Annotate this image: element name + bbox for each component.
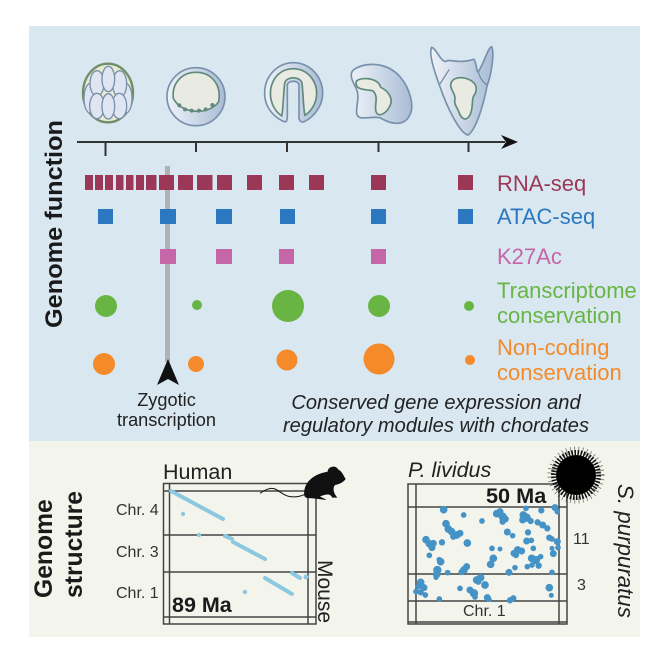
chromosome labels: Chr. 3: [116, 544, 159, 561]
embryo: gastrula: [265, 63, 323, 122]
embryo: pluteus: [431, 47, 493, 135]
RNA-seq squares: [85, 175, 473, 190]
K27Ac squares: [160, 249, 386, 264]
label: P. lividus: P. lividus: [408, 458, 492, 482]
dot plot: human vs mouse: [116, 460, 336, 624]
dot plot: P. lividus vs S. purpuratus: [408, 458, 638, 624]
legend labels: K27Ac: [497, 244, 562, 269]
label: zygotic transcription: Zygotic: [137, 390, 196, 410]
legend labels: [497, 171, 637, 385]
chromosome labels: Chr. 1: [116, 585, 159, 602]
embryo: blastula: [167, 68, 225, 126]
heading: genome structure: structure: [61, 491, 88, 598]
label: zygotic transcription: transcription: [117, 410, 216, 430]
legend labels: conservation: [497, 303, 622, 328]
embryo: prism: [351, 64, 412, 123]
label: mouse: Mouse: [313, 560, 336, 623]
legend labels: conservation: [497, 360, 622, 385]
label: 89 Ma: 89 Ma: [172, 593, 233, 617]
chromosome labels: [116, 502, 159, 602]
caption: conserved modules: regulatory modules with chordates: [283, 415, 589, 437]
legend labels: RNA-seq: [497, 171, 586, 196]
panel: genome structure: [29, 441, 640, 637]
label: 50 Ma: 50 Ma: [486, 483, 547, 508]
panel: genome function: [29, 26, 640, 441]
transcriptome conservation circles: [95, 290, 474, 322]
labels: chromosomes: [463, 531, 590, 620]
legend labels: Non-coding: [497, 335, 610, 360]
legend labels: ATAC-seq: [497, 204, 595, 229]
chromosome labels: Chr. 4: [116, 502, 159, 519]
zygotic transcription arrowhead: [157, 359, 179, 385]
label: human: Human: [163, 460, 232, 484]
non-coding conservation circles: [93, 344, 475, 375]
labels: chromosomes: 11: [573, 531, 590, 548]
label: S. purpuratus: S. purpuratus: [613, 484, 638, 618]
timeline arrow: [77, 135, 518, 156]
zygotic transcription marker line: [165, 166, 170, 362]
heading: genome structure: [31, 491, 88, 598]
icon: sea urchin: [551, 450, 601, 500]
heading: genome function: Genome function: [41, 120, 68, 328]
ATAC-seq squares: [98, 209, 473, 224]
labels: chromosomes: Chr. 1: [463, 603, 506, 620]
embryo: morula: [83, 64, 133, 122]
labels: chromosomes: 3: [577, 577, 586, 594]
legend labels: Transcriptome: [497, 278, 637, 303]
heading: genome structure: Genome: [31, 499, 58, 598]
icon: mouse: [260, 467, 346, 500]
scatter dots: [414, 505, 560, 603]
caption: conserved modules: Conserved gene expression and: [291, 392, 581, 414]
